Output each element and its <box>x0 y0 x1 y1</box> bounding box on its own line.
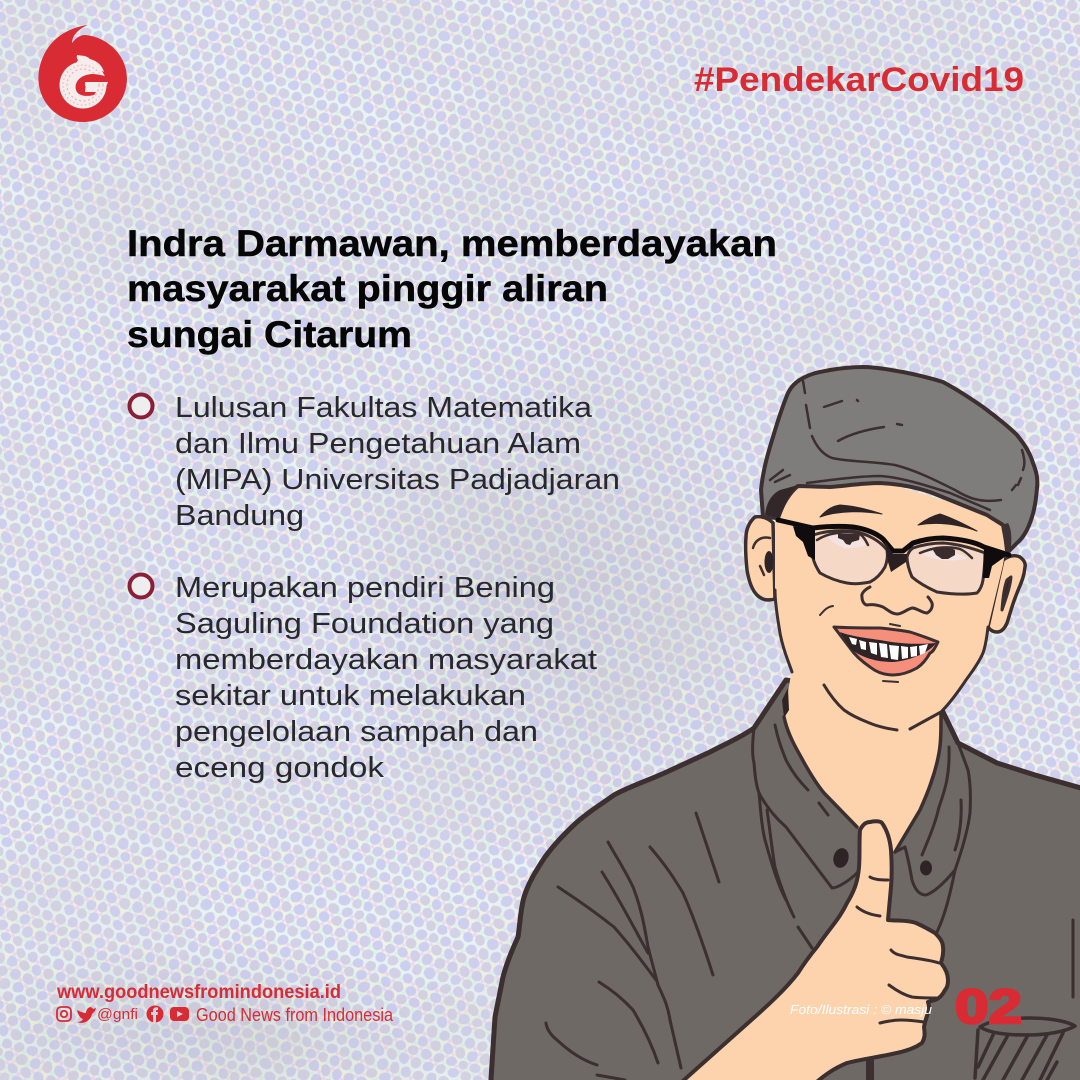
left collar <box>752 725 857 948</box>
pocket <box>975 1018 1075 1080</box>
shirt <box>490 680 1080 1080</box>
left lens <box>813 531 887 584</box>
bullet text <box>175 572 597 784</box>
right collar <box>895 743 970 932</box>
teeth <box>849 637 928 660</box>
bullet text: Saguling Foundation yang <box>175 608 554 640</box>
collar button right <box>920 860 932 876</box>
bullet text: Lulusan Fakultas Matematika <box>175 392 593 424</box>
logo emblem <box>60 55 110 108</box>
title: masyarakat pinggir aliran <box>127 268 608 309</box>
icon: twitter <box>77 1007 96 1023</box>
icon: facebook <box>146 1006 164 1023</box>
logo disc <box>38 25 127 122</box>
hand creases <box>857 877 939 1023</box>
illustration: man giving thumbs up <box>490 367 1080 1080</box>
bullet text: Bandung <box>175 500 304 532</box>
left ear <box>746 517 775 600</box>
hat stitching <box>770 381 1024 510</box>
left eye <box>827 535 867 548</box>
eyebrows <box>820 505 882 517</box>
brand name: Good News from Indonesia <box>196 1005 394 1025</box>
bullet one <box>130 392 620 532</box>
logo <box>38 25 127 122</box>
title <box>127 223 777 355</box>
hashtag: #PendekarCovid19 <box>694 61 1024 99</box>
bullet two <box>130 572 597 784</box>
bullet text: pengelolaan sampah dan <box>175 716 538 748</box>
ear inner <box>753 537 770 575</box>
bullet text: Merupakan pendiri Bening <box>175 572 555 604</box>
bullet text: sekitar untuk melakukan <box>175 680 526 712</box>
shirt folds <box>546 813 1073 1080</box>
title: Indra Darmawan, memberdayakan <box>127 223 777 264</box>
icon: youtube <box>170 1007 189 1021</box>
face <box>775 478 1010 730</box>
page number: 02 <box>955 981 1022 1034</box>
website: www.goodnewsfromindonesia.id <box>56 982 341 1003</box>
neck <box>784 680 945 852</box>
hair <box>765 485 798 518</box>
photo credit: Foto/Ilustrasi : © masju <box>790 1002 932 1017</box>
mouth <box>834 627 938 675</box>
bullet text: dan Ilmu Pengetahuan Alam <box>175 428 581 460</box>
hat <box>761 367 1037 552</box>
collar button left <box>831 846 851 870</box>
glasses frame <box>778 520 1009 578</box>
nose <box>862 587 932 614</box>
bullet text: eceng gondok <box>175 752 385 784</box>
icon: instagram <box>57 1007 71 1021</box>
bullet text <box>175 392 620 532</box>
chin mark <box>883 624 900 682</box>
bullet marker <box>130 574 152 598</box>
bullet text: memberdayakan masyarakat <box>175 644 597 676</box>
bullet marker <box>130 394 152 418</box>
hand <box>675 821 948 1080</box>
right ear <box>988 556 1025 632</box>
title: sungai Citarum <box>127 314 412 355</box>
handle: @gnfi <box>97 1006 138 1023</box>
right eye <box>922 551 968 561</box>
collar shadow <box>782 688 789 718</box>
right lens <box>907 543 985 594</box>
placket seam <box>866 1060 874 1080</box>
bullet text: (MIPA) Universitas Padjadjaran <box>175 464 620 496</box>
footer <box>56 982 394 1025</box>
